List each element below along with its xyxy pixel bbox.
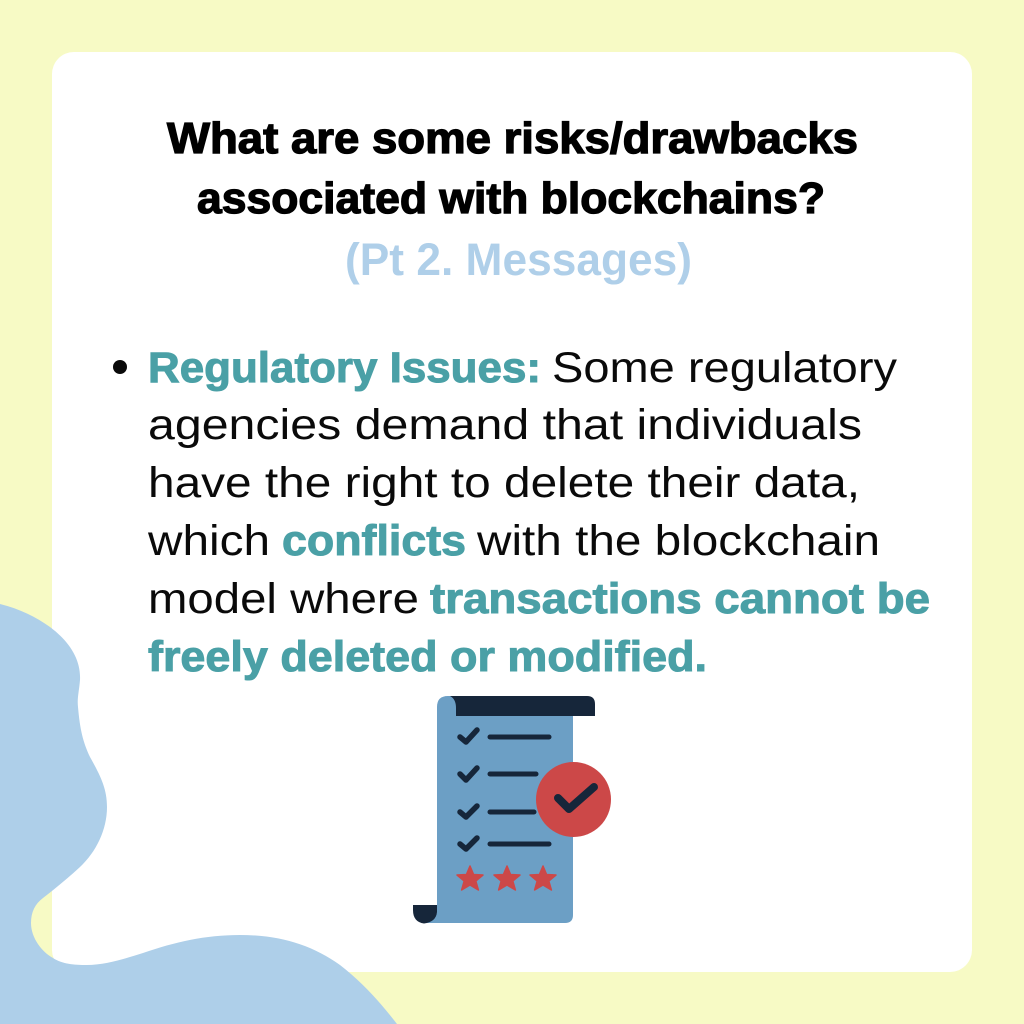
icon: checklist scroll bbox=[413, 696, 611, 924]
scroll bottom curl bbox=[413, 905, 437, 924]
line 6: freely deleted or modified. bbox=[148, 633, 707, 681]
line 3: have the right to delete their data, bbox=[148, 459, 860, 507]
red check badge bbox=[536, 762, 611, 837]
line 2: agencies demand that individuals bbox=[148, 401, 862, 449]
line 5: model where bbox=[148, 575, 419, 623]
line 1: Some regulatory bbox=[552, 344, 898, 392]
title bbox=[167, 114, 858, 223]
title: associated with blockchains? bbox=[197, 174, 825, 223]
line 5: transactions cannot be bbox=[430, 575, 930, 623]
bullet marker bbox=[113, 360, 127, 374]
line 1: Regulatory Issues: bbox=[148, 344, 541, 392]
rating stars bbox=[457, 866, 556, 890]
subtitle: (Pt 2. Messages) bbox=[345, 234, 692, 285]
checklist rows bbox=[460, 730, 549, 849]
line 4: conflicts bbox=[282, 517, 466, 565]
line 1 bbox=[148, 344, 898, 392]
bullet point text bbox=[113, 344, 930, 681]
line 4: which bbox=[147, 517, 270, 565]
line 4 bbox=[147, 517, 880, 565]
title: What are some risks/drawbacks bbox=[167, 114, 858, 163]
scroll top bar bbox=[450, 696, 595, 716]
decorative blue blob bbox=[0, 604, 397, 1024]
line 4: with the blockchain bbox=[476, 517, 880, 565]
line 5 bbox=[148, 575, 930, 623]
scroll paper bbox=[425, 696, 573, 923]
